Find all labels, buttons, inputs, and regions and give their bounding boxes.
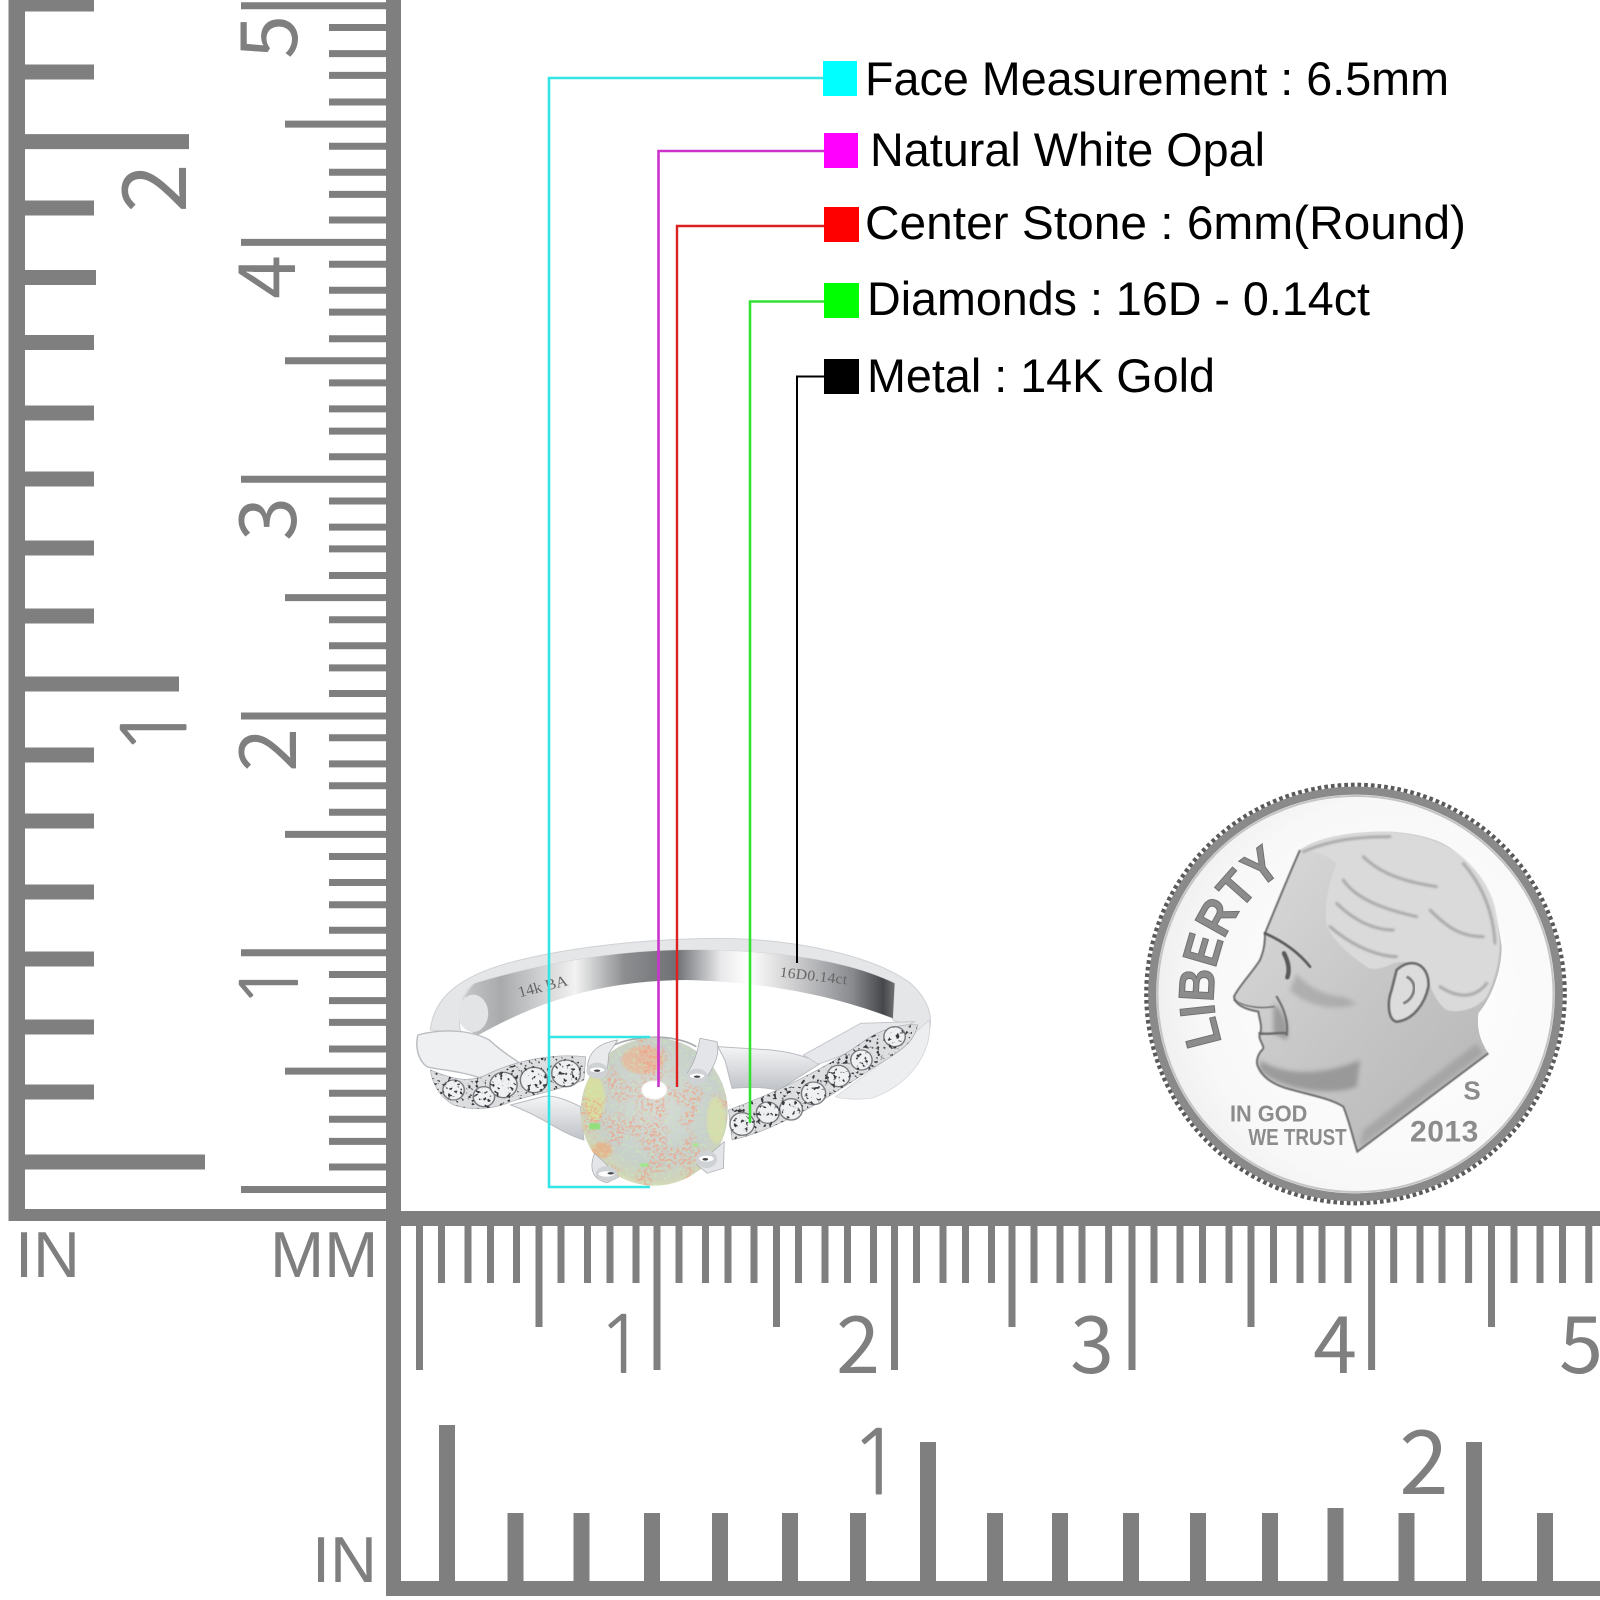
millimetre numerals bottom: 3: [1070, 1281, 1114, 1396]
legend item: metal: Metal : 14K Gold: [867, 349, 1215, 402]
head contour: [1234, 850, 1488, 1152]
prong bottom right: [696, 1142, 724, 1173]
label MM: MM: [270, 1218, 378, 1291]
brow and eye: [1265, 933, 1310, 977]
inch numerals: 2: [83, 163, 212, 213]
prong top right: [686, 1038, 718, 1085]
horizontal ruler: [386, 1211, 1600, 1596]
left twist strand: [417, 1031, 523, 1080]
back prong rim: [611, 1037, 696, 1047]
IN GOD WE TRUST lettering: IN GOD: [1230, 1101, 1307, 1127]
right upper strand: [804, 1022, 914, 1064]
legend item: natural white opal: Natural White Opal: [870, 123, 1265, 176]
mouth and cheek lines: [1234, 997, 1287, 1035]
ring photo illustration: [417, 938, 930, 1187]
millimetre numerals: 1: [231, 961, 310, 1009]
horizontal ruler frame: [386, 1211, 1600, 1596]
millimetre numerals: 4: [203, 255, 318, 299]
left lower strand: [511, 1096, 584, 1140]
legend item: face measurement: Face Measurement : 6.5mm: [865, 52, 1449, 105]
ruler unit labels: [15, 1218, 378, 1596]
right diamond row: [729, 1025, 918, 1140]
millimetre ticks on horizontal ruler: [420, 1226, 1589, 1370]
prongs: [586, 1038, 724, 1183]
coin: dime: [1144, 782, 1567, 1206]
face shading: [1260, 973, 1483, 1147]
leader: natural white opal: [658, 151, 824, 1087]
opal stone: [579, 1037, 730, 1187]
right lower strand: [836, 1020, 930, 1099]
leader: metal: [797, 376, 824, 963]
inch ticks on vertical ruler: [25, 4, 205, 1162]
legend item: diamonds: Diamonds : 16D - 0.14ct: [867, 272, 1370, 325]
label IN bottom: IN: [312, 1523, 377, 1596]
LIBERTY lettering: LIBERTY: [1178, 843, 1274, 1049]
ear fold: [1403, 977, 1414, 1003]
inch numerals: 1: [110, 703, 199, 757]
millimetre numerals bottom: 1: [597, 1306, 645, 1385]
mint mark S: S: [1463, 1075, 1481, 1105]
head silhouette: [1234, 832, 1502, 1152]
millimetre ticks on vertical ruler: [241, 6, 386, 1190]
left diamond row: [430, 1056, 586, 1109]
ear: [1389, 963, 1428, 1022]
engraving 14k BA: 14k BA: [516, 973, 570, 1001]
millimetre numerals bottom: 4: [1313, 1281, 1357, 1396]
ring outer band: [430, 938, 930, 1033]
millimetre numerals bottom: 2: [836, 1281, 880, 1396]
hair strands: [1303, 837, 1495, 995]
coin inner ring: [1157, 796, 1553, 1192]
inch numerals bottom: 2: [1399, 1391, 1449, 1520]
prong top left: [586, 1040, 618, 1079]
vertical ruler frame: [8, 0, 401, 1221]
millimetre numerals bottom: [597, 1281, 1600, 1396]
millimetre numerals: [203, 15, 320, 1009]
leader: center stone: [677, 226, 824, 1087]
millimetre numerals: 2: [204, 728, 319, 772]
IN GOD WE TRUST lettering: [1230, 1101, 1347, 1150]
hair: [1300, 832, 1500, 1011]
ring inner band: [461, 950, 895, 1035]
leader: face measurement bracket: [549, 78, 823, 1187]
prong bottom left: [592, 1153, 619, 1183]
coin reeded edge: [1146, 785, 1564, 1203]
inch ticks on horizontal ruler: [447, 1425, 1545, 1581]
inch numerals: [83, 163, 212, 757]
portrait: [1234, 832, 1502, 1152]
inch numerals bottom: 1: [849, 1418, 903, 1507]
ring inner highlight: [458, 995, 488, 1032]
legend: [823, 52, 1466, 402]
engraving 16D0.14ct: 16D0.14ct: [779, 964, 849, 988]
IN GOD WE TRUST lettering: WE TRUST: [1248, 1124, 1347, 1150]
label IN left: IN: [15, 1218, 80, 1291]
leader: diamonds: [750, 302, 824, 1123]
millimetre numerals: 5: [205, 15, 320, 59]
coin rim: [1152, 791, 1559, 1197]
vertical ruler: [8, 0, 401, 1221]
inch numerals bottom: [849, 1391, 1449, 1520]
year 2013: 2013: [1410, 1116, 1478, 1149]
legend item: center stone: Center Stone : 6mm(Round): [865, 196, 1466, 249]
right middle strand: [718, 1047, 820, 1090]
millimetre numerals: 3: [204, 497, 319, 541]
